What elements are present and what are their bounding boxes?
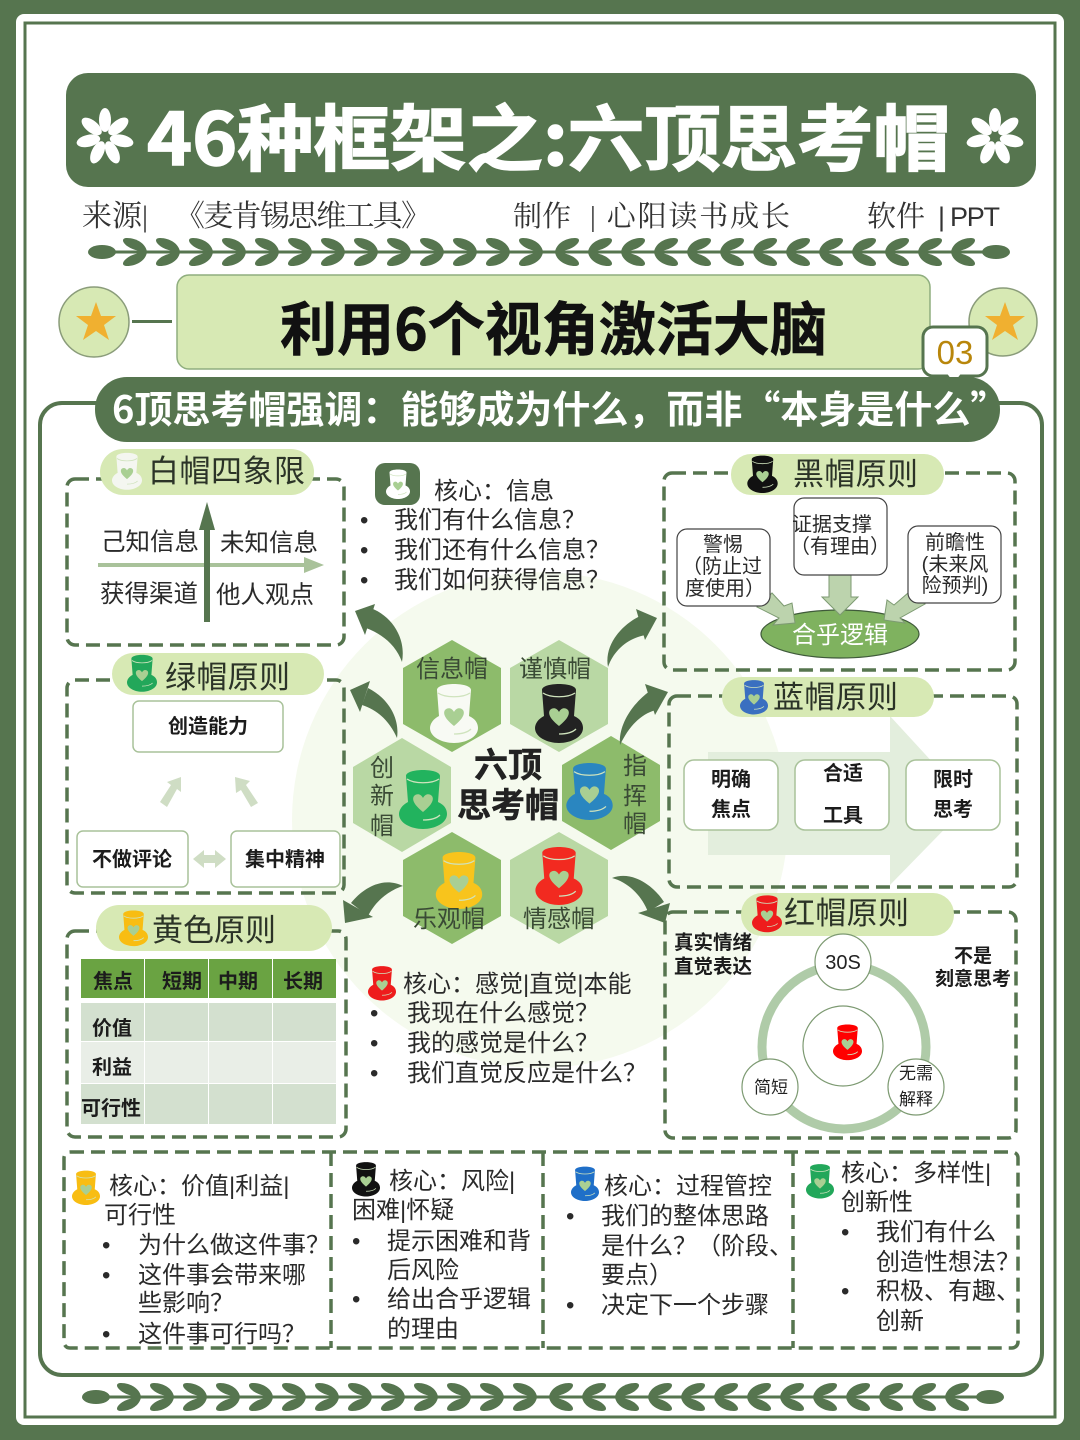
right note: 不是: [954, 946, 992, 967]
evaluation table: 中期: [218, 970, 258, 993]
column: green hat core: 创新性: [841, 1189, 913, 1216]
box: caution: 度使用）: [685, 577, 765, 600]
left star badge: [59, 287, 172, 357]
small linking arrows: [160, 777, 258, 868]
white hat core questions: 我们还有什么信息？: [394, 537, 610, 564]
left note: 直觉表达: [674, 956, 752, 978]
column: yellow hat core: 可行性: [104, 1202, 176, 1229]
box: caution: 警惕: [703, 533, 743, 556]
arrow: to black panel: [607, 609, 657, 667]
yellow hat heading: 黄色原则: [152, 913, 276, 948]
hexagon: caution: 谨慎帽: [519, 656, 591, 683]
column: green hat core: •: [841, 1278, 849, 1305]
hexagon: caution: [510, 640, 608, 752]
box: evidence: [790, 498, 890, 575]
box: focus: [231, 831, 340, 887]
left note: [674, 931, 752, 978]
box: no judgement: 不做评论: [92, 848, 172, 871]
white hat core questions: 我们有什么信息？: [394, 507, 586, 534]
panel: red hat: [665, 893, 1016, 1138]
column: green hat core: 创新: [876, 1308, 924, 1335]
hexagon: emotion: [510, 832, 608, 944]
column: black hat core: 提示困难和背: [387, 1228, 531, 1255]
title banner: 46种框架之:六顶思考帽: [147, 81, 950, 186]
hexagon: information: [403, 640, 501, 752]
hexagon: emotion: 情感帽: [523, 906, 595, 933]
red hat core questions: 我的感觉是什么？: [407, 1030, 599, 1057]
white hat core questions: •: [360, 507, 368, 534]
ring diagram: 简短: [754, 1078, 788, 1097]
red hat core questions: 我们直觉反应是什么？: [407, 1060, 647, 1087]
hexagon: information: 信息帽: [416, 656, 488, 683]
logic oval: [761, 610, 919, 658]
box: clear focus: 明确: [711, 768, 751, 791]
quadrant axes: [98, 502, 324, 622]
hexagon: direction: [562, 736, 660, 850]
green hat heading: 绿帽原则: [165, 660, 290, 695]
box: suitable tools: [795, 760, 889, 830]
column: blue hat core: •: [566, 1292, 574, 1319]
leaf divider top: [88, 238, 1010, 266]
red hat heading: 红帽原则: [784, 896, 909, 931]
white hat core questions: 核心：信息: [434, 478, 554, 505]
column: black hat core: 后风险: [387, 1257, 459, 1284]
hexagon: innovation: [353, 738, 451, 852]
box: timed thinking: 思考: [933, 798, 973, 821]
ring diagram: 30S: [825, 952, 861, 974]
column: yellow hat core: •: [102, 1232, 110, 1259]
subtitle panel: [177, 275, 930, 369]
column: blue hat core: 我们的整体思路: [601, 1203, 769, 1230]
box: focus: 集中精神: [245, 848, 325, 871]
hexagon: innovation: 帽: [370, 813, 394, 840]
bottom core panel: [64, 1152, 1020, 1348]
source credits line: 软件: [867, 200, 925, 233]
column: blue hat core: 要点）: [601, 1262, 673, 1289]
white hat heading: 白帽四象限: [148, 454, 305, 489]
quadrant labels: 他人观点: [216, 581, 314, 609]
blue hat heading: 蓝帽原则: [773, 680, 898, 715]
evaluation table: 焦点: [93, 970, 133, 993]
column: yellow hat core: •: [102, 1262, 110, 1289]
box: suitable tools: 工具: [823, 805, 863, 827]
box: evidence: （有理由）: [790, 535, 890, 558]
column: yellow hat core: •: [102, 1321, 110, 1348]
evaluation table: 价值: [92, 1017, 132, 1040]
column: green hat core: 核心：多样性|: [841, 1160, 991, 1187]
panel: yellow hat: [67, 905, 346, 1137]
box: foresight: 险预判): [922, 574, 988, 597]
logic oval: 合乎逻辑: [792, 622, 888, 649]
arrow: to red panel: [612, 876, 670, 923]
evaluation table: 可行性: [81, 1097, 141, 1120]
page number callout: 03: [937, 334, 973, 371]
ring diagram: 无需: [899, 1064, 933, 1083]
center title: 思考帽: [457, 787, 559, 825]
quadrant labels: 获得渠道: [100, 580, 198, 608]
column: black hat core: 困难|怀疑: [352, 1197, 454, 1224]
column: black hat core: 的理由: [387, 1316, 459, 1343]
box: clear focus: 焦点: [711, 798, 751, 821]
red hat core questions: •: [370, 1060, 378, 1087]
box: timed thinking: 限时: [933, 768, 973, 791]
column: yellow hat core: 这件事可行吗？: [138, 1321, 306, 1348]
red hat core questions: 我现在什么感觉？: [407, 1000, 599, 1027]
column: yellow hat core: 些影响？: [138, 1290, 234, 1317]
panel: black hat: [664, 454, 1015, 670]
column: yellow hat core: 这件事会带来哪: [138, 1262, 306, 1289]
hexagon: direction: 挥: [623, 783, 647, 810]
column: green hat core: •: [841, 1219, 849, 1246]
black hat heading: [731, 454, 944, 495]
arrow: to white panel: [355, 604, 403, 662]
right star badge: [969, 288, 1037, 356]
arrow: to green panel: [350, 681, 397, 738]
source credits line: [82, 200, 1000, 233]
column: black hat core: •: [352, 1228, 360, 1255]
evaluation table: 利益: [92, 1056, 132, 1079]
box: caution: （防止过: [682, 555, 762, 578]
evaluation table: 短期: [162, 970, 202, 993]
box: foresight: [908, 526, 1001, 603]
hexagon cluster: [353, 640, 660, 944]
evaluation table: [81, 959, 336, 1124]
right note: [935, 946, 1011, 990]
ring diagram: [742, 934, 944, 1129]
black hat heading: 黑帽原则: [793, 457, 918, 492]
right note: 刻意思考: [935, 967, 1011, 990]
logic arrows: [757, 575, 925, 625]
column: black hat core: 给出合乎逻辑: [387, 1286, 531, 1313]
hexagon: innovation: 创: [370, 755, 394, 782]
source credits line: 来源|: [82, 200, 148, 233]
column: blue hat core: 决定下一个步骤: [601, 1292, 769, 1319]
white hat core questions: [360, 463, 610, 594]
source credits line: | 心阳读书成长: [590, 200, 790, 233]
source credits line: 制作: [513, 200, 571, 233]
column: blue hat core: [566, 1167, 793, 1319]
hexagon: direction: 帽: [623, 811, 647, 838]
column: black hat core: 核心：风险|: [389, 1168, 515, 1195]
white hat core questions: •: [360, 537, 368, 564]
panel: green hat: [67, 653, 344, 893]
column: blue hat core: 核心：过程管控: [604, 1173, 772, 1200]
section header pill: 6顶思考帽强调：能够成为什么，而非“本身是什么”: [112, 379, 1008, 434]
column: yellow hat core: 为什么做这件事？: [138, 1232, 330, 1259]
left note: 真实情绪: [674, 931, 752, 954]
green hat heading: [112, 653, 324, 695]
evaluation table: 长期: [283, 970, 323, 993]
arrow: to blue panel: [620, 684, 668, 745]
box: timed thinking: [906, 760, 1000, 830]
box: evidence: 证据支撑: [792, 513, 872, 536]
hexagon: innovation: 新: [370, 783, 394, 810]
red hat core questions: •: [370, 1030, 378, 1057]
column: green hat core: [806, 1160, 1020, 1335]
quadrant labels: 己知信息: [101, 528, 199, 556]
yellow hat heading: [96, 905, 332, 951]
column: green hat core: 我们有什么: [876, 1219, 996, 1246]
white hat core questions: •: [360, 567, 368, 594]
hexagon: direction: 指: [623, 753, 647, 780]
quadrant labels: [100, 528, 318, 609]
quadrant labels: 未知信息: [220, 529, 318, 557]
box: creativity: [133, 701, 283, 752]
leaf divider bottom: [82, 1383, 1004, 1411]
column: blue hat core: 是什么？（阶段、: [601, 1233, 793, 1260]
column: black hat core: •: [352, 1286, 360, 1313]
white hat core questions: 我们如何获得信息？: [394, 567, 610, 594]
red hat heading: [741, 893, 954, 936]
center title: 六顶: [474, 747, 542, 785]
big pale arrow: [708, 716, 970, 885]
box: creativity: 创造能力: [168, 715, 248, 738]
column: black hat core: [352, 1162, 531, 1343]
column: green hat core: 创造性想法？: [876, 1249, 1020, 1276]
page number callout: [923, 327, 987, 385]
box: foresight: 前瞻性: [925, 531, 985, 554]
subtitle panel: 利用6个视角激活大脑: [280, 283, 827, 367]
panel: white hat: [67, 449, 344, 645]
red hat core questions: [368, 966, 647, 1087]
white hat heading: [100, 449, 314, 495]
pale background circle: [292, 572, 788, 1068]
main outer frame: [40, 403, 1042, 1375]
box: suitable tools: 合适: [823, 762, 863, 785]
column: blue hat core: •: [566, 1203, 574, 1230]
blue hat heading: [722, 677, 934, 717]
center title: [457, 747, 559, 825]
red hat core questions: 核心：感觉|直觉|本能: [403, 971, 631, 998]
column: yellow hat core: [72, 1171, 330, 1348]
column: green hat core: 积极、有趣、: [876, 1278, 1020, 1305]
box: foresight: (未来风: [922, 553, 988, 576]
arrow: to yellow panel: [343, 882, 403, 923]
box: caution: [677, 529, 770, 606]
hexagon: optimism: 乐观帽: [413, 906, 485, 933]
source credits line: | PPT: [938, 202, 1000, 232]
panel: blue hat: [669, 677, 1017, 887]
source credits line: 《麦肯锡思维工具》: [175, 200, 431, 233]
column: yellow hat core: 核心：价值|利益|: [109, 1173, 289, 1200]
red hat core questions: •: [370, 1000, 378, 1027]
box: clear focus: [684, 760, 778, 830]
ring diagram: 解释: [899, 1090, 933, 1109]
box: no judgement: [77, 831, 188, 887]
hexagon: optimism: [403, 832, 501, 944]
